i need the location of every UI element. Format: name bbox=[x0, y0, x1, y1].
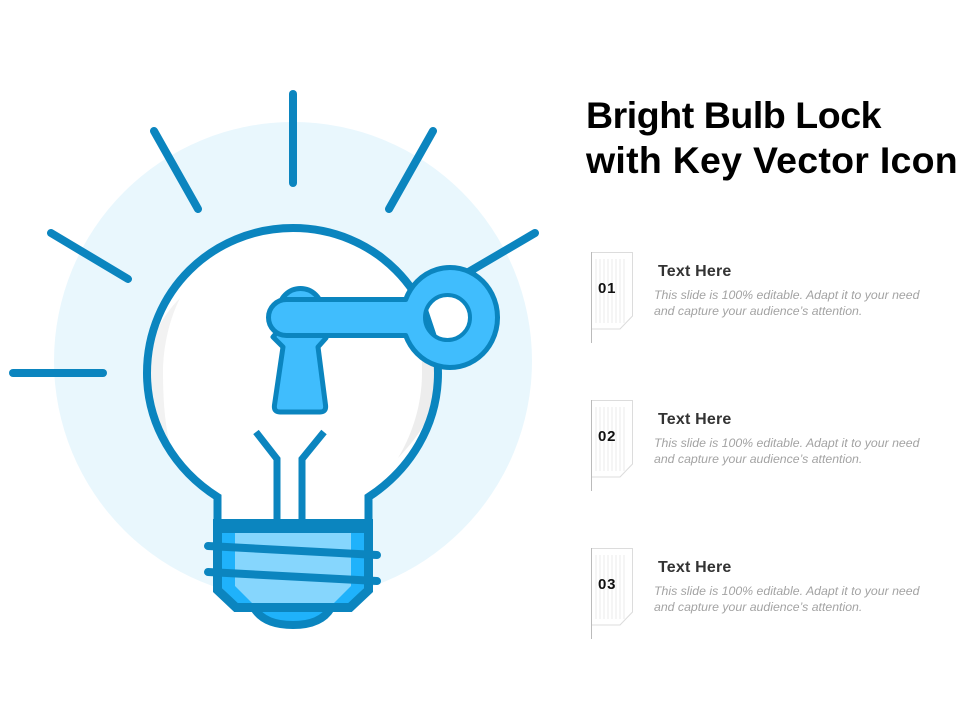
number 03: 03 bbox=[598, 576, 616, 593]
number tab 03 bbox=[591, 548, 633, 639]
heading 02: Text Here bbox=[658, 411, 732, 428]
title: Bright Bulb Lock bbox=[586, 94, 881, 136]
description 01 bbox=[654, 288, 920, 318]
description 02: This slide is 100% editable. Adapt it to your need bbox=[654, 436, 919, 450]
description 03 bbox=[654, 584, 920, 614]
background circle bbox=[54, 122, 532, 600]
bulb tip bbox=[254, 608, 331, 625]
heading 01: Text Here bbox=[658, 263, 732, 280]
number 02: 02 bbox=[598, 428, 616, 445]
number tab 02 bbox=[591, 400, 633, 491]
description 02 bbox=[654, 436, 920, 466]
title: with Key Vector Icon bbox=[586, 139, 958, 181]
description 01: This slide is 100% editable. Adapt it to your need bbox=[654, 288, 919, 302]
description 03: and capture your audience’s attention. bbox=[654, 600, 862, 614]
item 02 bbox=[591, 400, 920, 491]
description 01: and capture your audience’s attention. bbox=[654, 304, 862, 318]
number tab 01 bbox=[591, 252, 633, 343]
icon: keyhole bbox=[273, 288, 326, 412]
number 01: 01 bbox=[598, 280, 616, 297]
description 02: and capture your audience’s attention. bbox=[654, 452, 862, 466]
description 03: This slide is 100% editable. Adapt it to your need bbox=[654, 584, 919, 598]
screw base bbox=[218, 526, 368, 608]
item 01 bbox=[591, 252, 920, 343]
heading 03: Text Here bbox=[658, 559, 732, 576]
item 03 bbox=[591, 548, 920, 639]
title bbox=[586, 94, 958, 181]
icon: key bbox=[268, 268, 498, 368]
icon: light bulb bbox=[147, 228, 438, 625]
filament bbox=[256, 432, 324, 522]
icon: light rays bbox=[13, 94, 535, 373]
